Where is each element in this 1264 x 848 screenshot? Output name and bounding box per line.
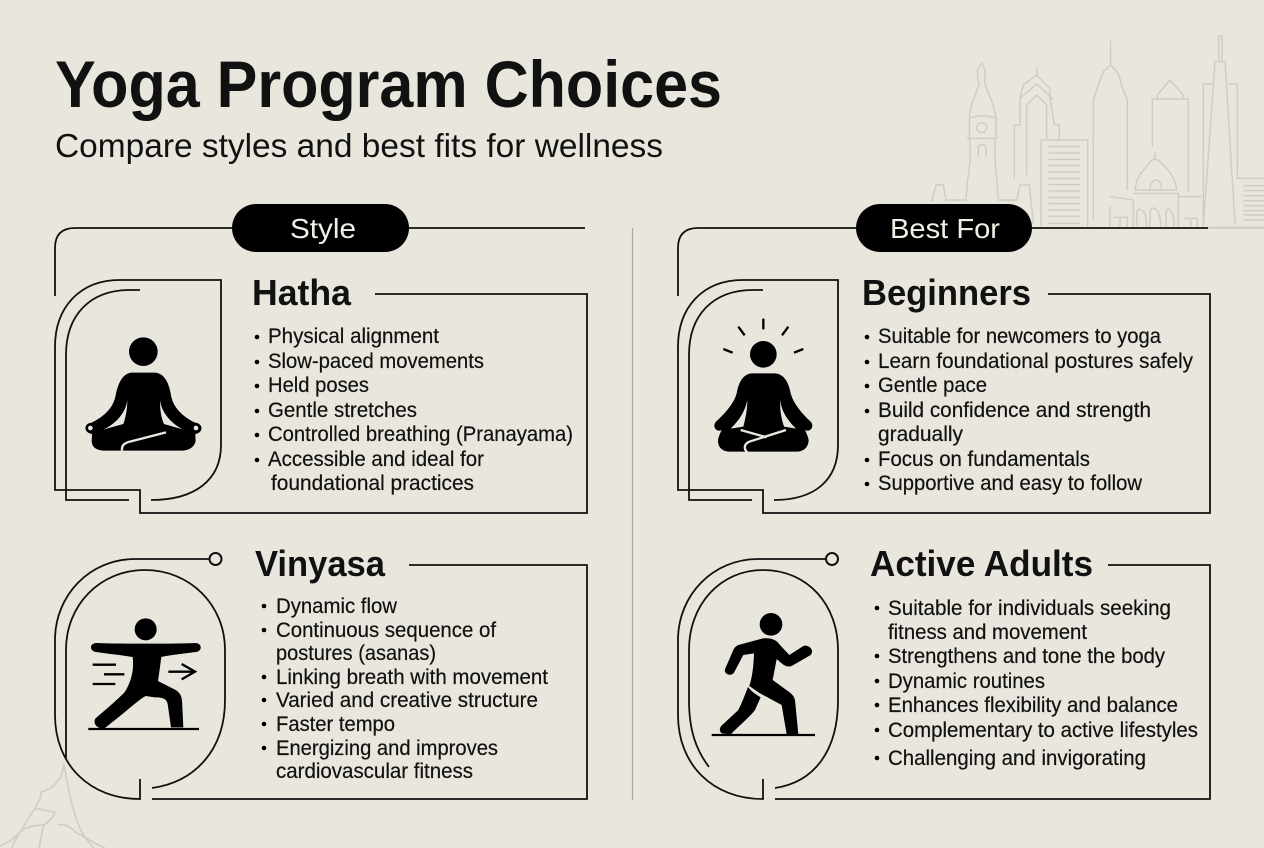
title: Yoga Program Choices <box>55 47 722 121</box>
Vinyasa list: Dynamic flow <box>276 595 398 618</box>
Hatha list: Held poses <box>268 374 369 397</box>
Active Adults list: Challenging and invigorating <box>888 747 1146 770</box>
Active Adults heading: Active Adults <box>870 543 1093 584</box>
Vinyasa list: Varied and creative structure <box>276 689 538 712</box>
Beginners list: Focus on fundamentals <box>878 448 1090 471</box>
panel: Active Adults <box>678 543 1210 799</box>
Active Adults list: Enhances flexibility and balance <box>888 694 1178 717</box>
subtitle: Compare styles and best fits for wellness <box>55 127 663 164</box>
Vinyasa list: cardiovascular fitness <box>276 760 473 783</box>
Beginners frame <box>678 280 1210 513</box>
Beginners heading: Beginners <box>862 272 1031 313</box>
center divider <box>632 228 634 800</box>
Vinyasa list: Continuous sequence of <box>276 619 496 642</box>
Hatha list: Physical alignment <box>268 325 439 348</box>
Beginners list: Suitable for newcomers to yoga <box>878 325 1161 348</box>
Hatha list <box>255 325 573 495</box>
panel: Hatha <box>55 272 587 513</box>
icon: meditating figure <box>85 337 202 451</box>
Beginners list: Supportive and easy to follow <box>878 472 1143 495</box>
Hatha frame <box>55 280 587 513</box>
Hatha list: Accessible and ideal for <box>268 448 484 471</box>
column header: Style <box>55 204 585 296</box>
Beginners list: Gentle pace <box>878 374 987 397</box>
Active Adults list: Suitable for individuals seeking <box>888 597 1171 620</box>
Hatha list: foundational practices <box>271 472 474 495</box>
Active Adults list: Dynamic routines <box>888 670 1045 693</box>
Beginners list <box>865 325 1193 495</box>
Beginners list: gradually <box>878 423 963 446</box>
Vinyasa list: Linking breath with movement <box>276 666 548 689</box>
Hatha list: Slow-paced movements <box>268 350 484 373</box>
Active Adults list: Complementary to active lifestyles <box>888 719 1198 742</box>
icon: meditating figure with rays <box>714 319 812 452</box>
Active Adults list: Strengthens and tone the body <box>888 645 1165 668</box>
icon: warrior pose figure <box>88 618 201 729</box>
Active Adults list: fitness and movement <box>888 621 1087 644</box>
background leaf illustration <box>0 763 105 848</box>
Hatha list: Controlled breathing (Pranayama) <box>268 423 573 446</box>
Vinyasa list: postures (asanas) <box>276 642 436 665</box>
Beginners list: Learn foundational postures safely <box>878 350 1193 373</box>
Active Adults frame <box>678 559 1210 799</box>
Hatha heading: Hatha <box>252 272 352 313</box>
column header: Best For <box>678 204 1264 296</box>
Vinyasa list: Energizing and improves <box>276 737 498 760</box>
panel: Vinyasa <box>55 543 587 799</box>
column header: Style: Style <box>290 213 356 244</box>
icon: walking figure <box>712 613 815 735</box>
Vinyasa frame <box>55 559 587 799</box>
Hatha list: Gentle stretches <box>268 399 417 422</box>
Beginners list: Build confidence and strength <box>878 399 1151 422</box>
Active Adults list <box>875 597 1198 770</box>
column header: Best For: Best For <box>890 213 1000 244</box>
background skyline illustration <box>932 36 1264 227</box>
Vinyasa heading: Vinyasa <box>255 543 386 584</box>
Vinyasa list <box>262 595 548 783</box>
Vinyasa list: Faster tempo <box>276 713 395 736</box>
panel: Beginners <box>678 272 1210 513</box>
